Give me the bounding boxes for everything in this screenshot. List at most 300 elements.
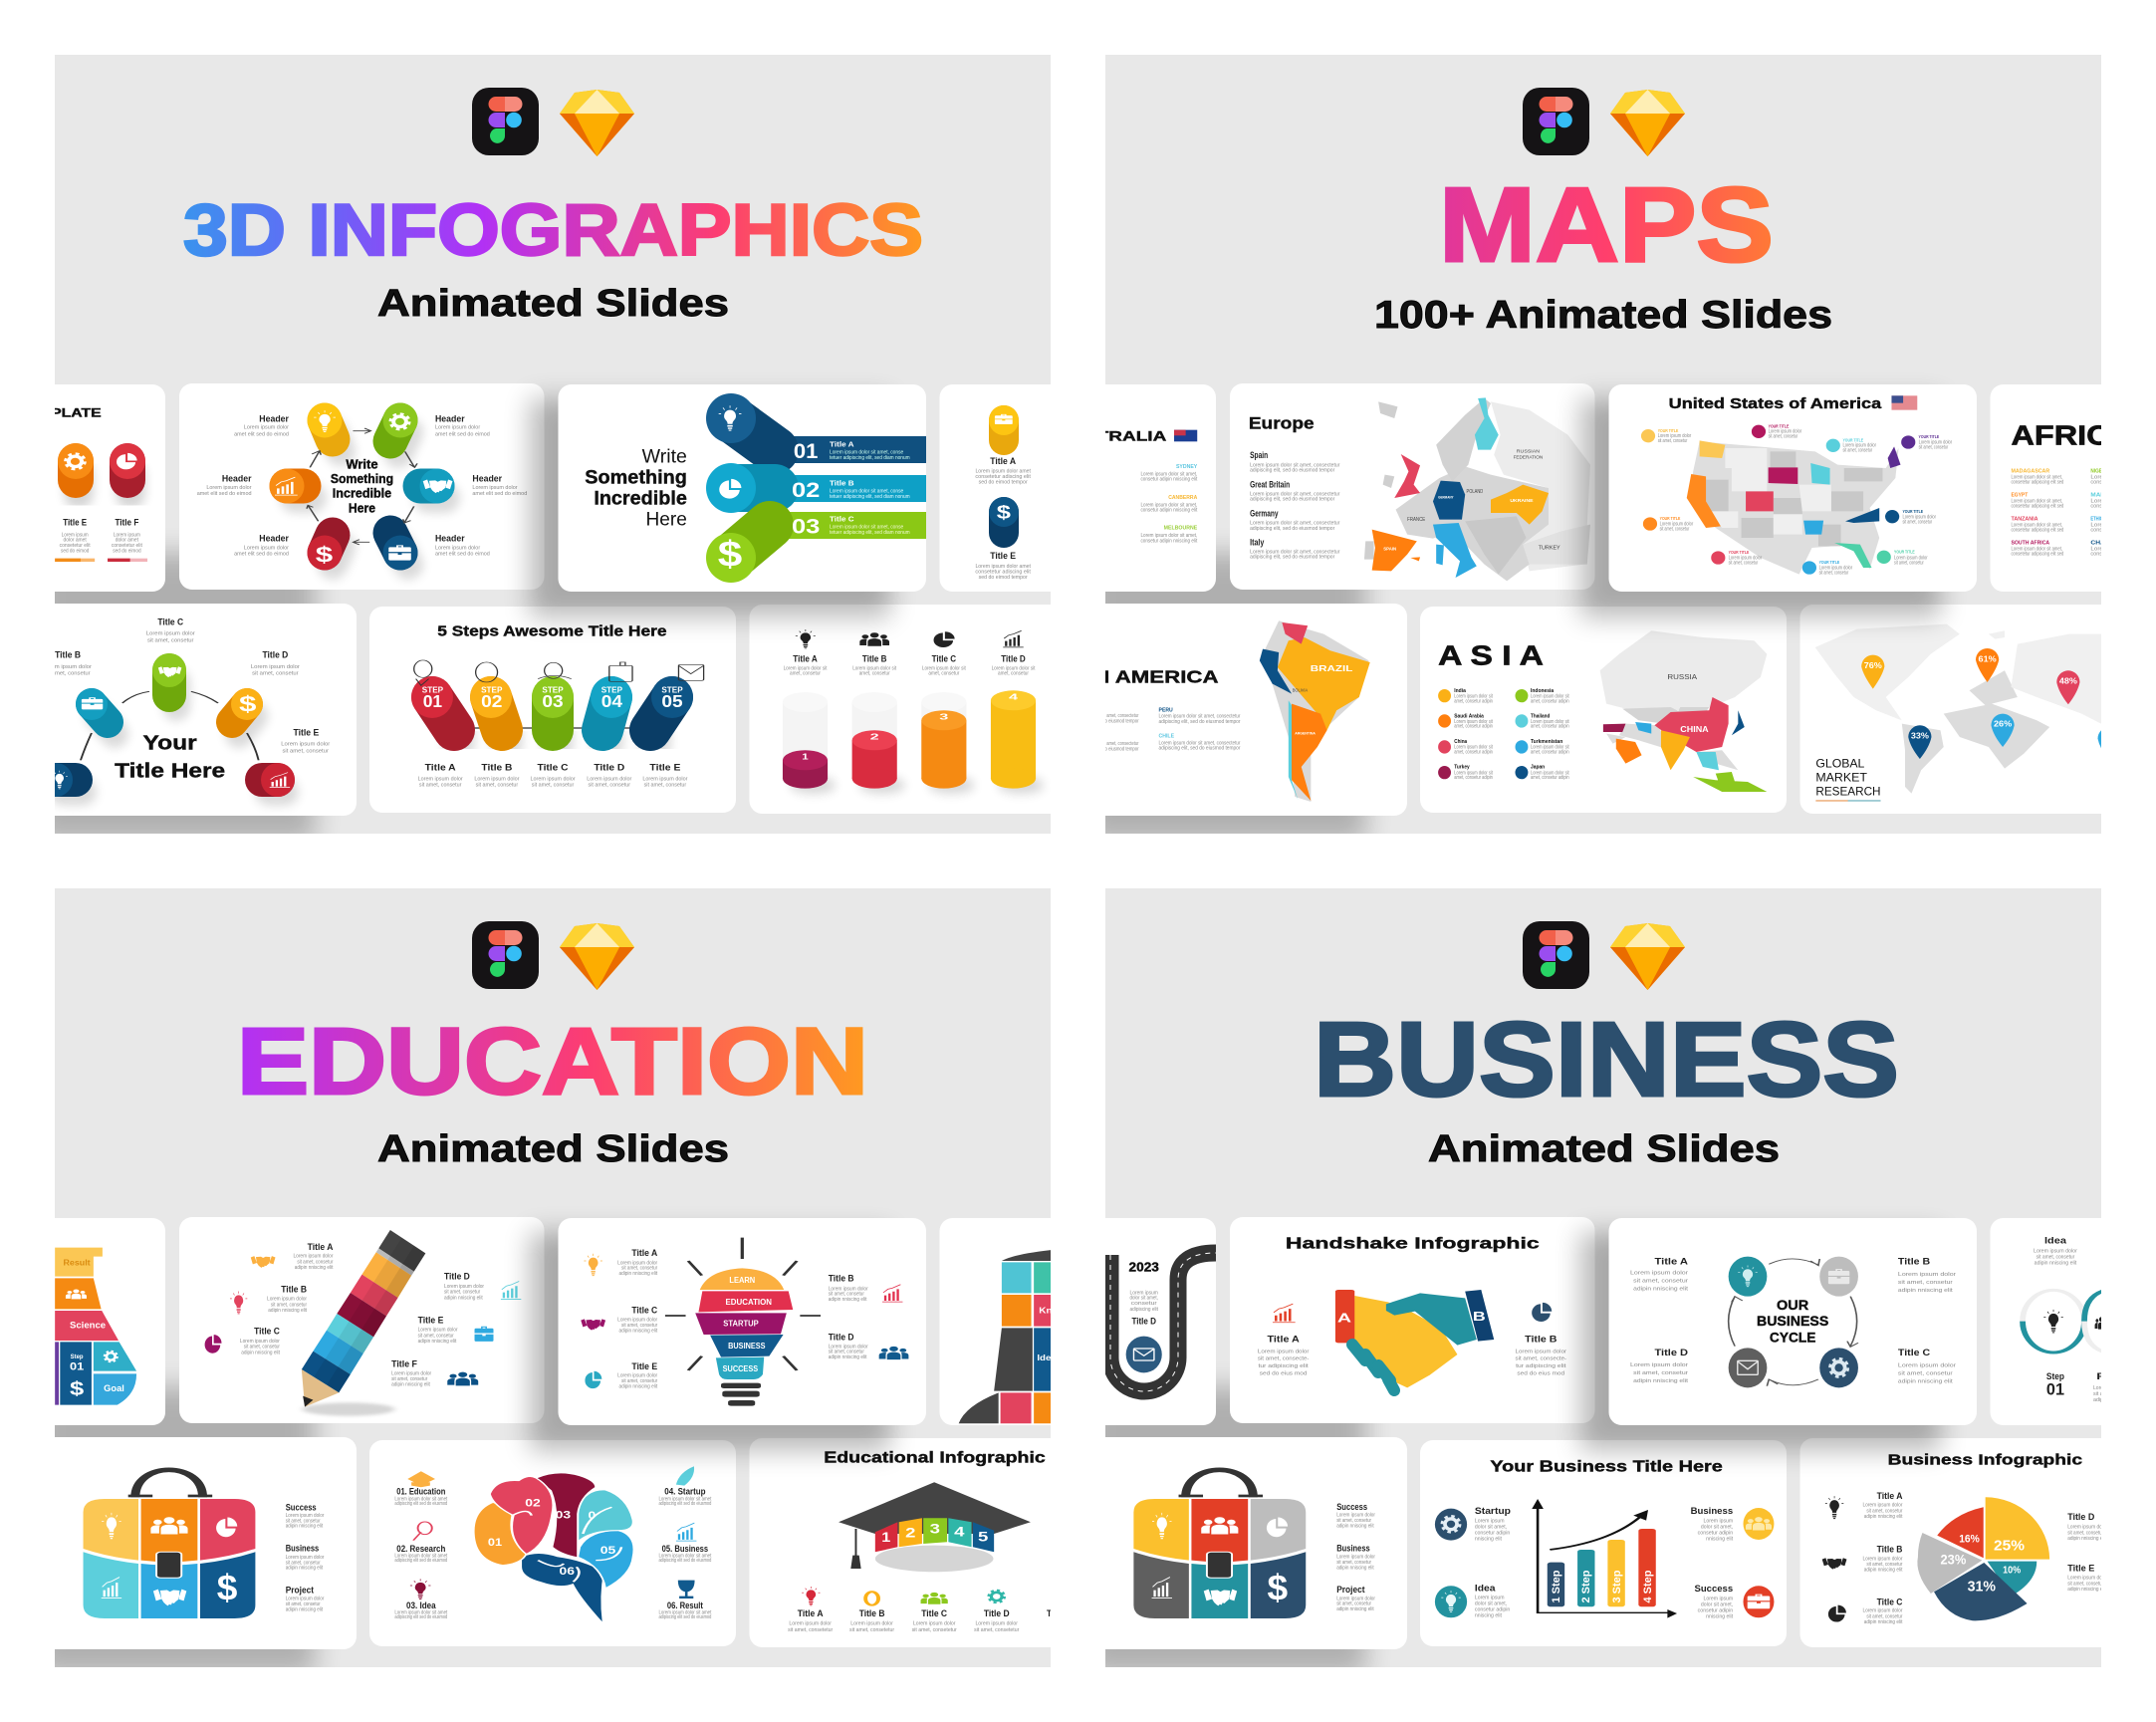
card: partial cylinders: Lorem ipsum dolor amet — [975, 468, 1031, 474]
legend: amet, consetur adipin — [1454, 723, 1493, 729]
icon: Figma logo — [1523, 88, 1589, 155]
legend: amet, consetur adipin — [1454, 698, 1493, 704]
card: pencil infographic: Title E — [418, 1315, 443, 1326]
card: brain infographic: 06. Result — [667, 1600, 703, 1610]
card: puzzle briefcase: Success — [286, 1502, 317, 1512]
card: puzzle briefcase: sit amet, consetur — [286, 1518, 321, 1524]
card: circular Your Title Here: Lorem ipsum dolor — [146, 630, 195, 636]
card: circular Your Title Here: Title Here — [115, 759, 225, 782]
card: business chart: consetur adipin — [1698, 1530, 1733, 1536]
card: business chart — [1420, 1440, 1787, 1646]
card: puzzle briefcase: Project — [286, 1585, 314, 1595]
map of Asia: CHINA — [1680, 725, 1709, 734]
card: business infographic pie: adipin nniscing elit — [2067, 1535, 2106, 1541]
card: business infographic pie: Title D — [2067, 1512, 2094, 1522]
card: handshake infographic: sit amet, consecte- — [1258, 1355, 1310, 1361]
percentage callouts: sit amet, consetur — [1842, 447, 1872, 453]
card: step rings: Idea — [2044, 1235, 2066, 1245]
card: numbered ribbons: Something — [585, 467, 687, 488]
card: Write Something Incredible Here cycle: Header — [222, 473, 252, 483]
card: puzzle briefcase: Lorem ipsum dolor — [286, 1512, 325, 1518]
title: 3D INFOGRAPHICS — [183, 190, 923, 271]
card: light bulb infographic: adipin nniscing elit — [618, 1383, 658, 1389]
title: BUSINESS — [1314, 1001, 1899, 1118]
card: business chart: Success — [1694, 1584, 1733, 1594]
card: light bulb infographic: sit amet, consetur — [621, 1322, 657, 1328]
card: template fragment: consetetur elit — [60, 542, 91, 548]
card: Write Something Incredible Here cycle: Lorem ipsum dolor — [206, 484, 252, 490]
card: Australia: consetur adipin nniscing elit — [1140, 538, 1198, 544]
card: puzzle briefcase business: adipin nniscing elit — [1336, 1605, 1374, 1611]
card: our business cycle: Lorem ipsum dolor — [1898, 1362, 1956, 1368]
card: educational infographic cap: Lorem ipsum dolor — [975, 1620, 1018, 1626]
percentage callouts: YOUR TITLE — [1729, 551, 1750, 555]
card: road timeline: dolor sit amet, — [1130, 1295, 1158, 1301]
card: cylinder bar chart: Lorem ipsum dolor sit — [922, 665, 966, 671]
card: science flask puzzle: Science — [70, 1321, 106, 1331]
panel: business — [1085, 888, 2121, 1675]
map of South America: BRAZIL — [1311, 663, 1352, 673]
card: Africa — [1990, 384, 2142, 592]
light bulb: SUCCESS — [723, 1364, 758, 1373]
card: brain infographic: 05. Business — [662, 1544, 708, 1554]
card: educational infographic cap: sit amet, consetetur — [788, 1626, 833, 1632]
card: educational infographic cap: sit amet, consetetur — [849, 1626, 894, 1632]
map of South America: ARGENTINA — [1295, 731, 1316, 736]
card: Write Something Incredible Here cycle — [179, 383, 544, 590]
card: template fragment: dolor amet — [116, 537, 138, 543]
legend: amet, consetur adipin — [1454, 774, 1493, 780]
card: brain infographic: adipiscing elit sed do eiusmod — [658, 1613, 712, 1619]
card: pencil infographic — [179, 1217, 544, 1423]
card: 5 steps: STEP — [481, 685, 502, 695]
green cylinder — [382, 402, 418, 441]
map pins — [1861, 648, 2121, 760]
card: cylinder bar chart: amet, consetur — [790, 670, 821, 676]
card: light bulb infographic: Title B — [829, 1273, 854, 1284]
percentage callouts: Lorem ipsum dolor — [1902, 514, 1936, 520]
card: numbered ribbons: Lorem ipsum dolor sit amet, conse — [830, 524, 903, 530]
card: educational infographic cap: Educational Infographic — [824, 1450, 1046, 1467]
card: numbered ribbons — [558, 384, 926, 592]
card: light bulb infographic: Lorem ipsum dolor — [829, 1286, 868, 1292]
card: road timeline: adipiscing elit — [1130, 1306, 1158, 1312]
card: brain infographic: 03. Idea — [406, 1600, 436, 1610]
legend: Thailand — [1531, 712, 1550, 719]
percentage callouts: YOUR TITLE — [1919, 435, 1939, 439]
shadow under lower-left card — [1085, 553, 1366, 842]
subtitle: Animated Slides — [377, 1128, 729, 1170]
card: South America map: CHILE — [1159, 732, 1174, 739]
icon: Figma logo — [1523, 921, 1589, 989]
graduation cap: 1 — [881, 1529, 890, 1545]
card: brain infographic: Lorem ipsum dolor sit amet — [658, 1496, 712, 1502]
card: partial cylinders: consetetur adiscing elit — [975, 473, 1031, 479]
card: 5 steps: STEP — [422, 685, 443, 695]
map of Europe: POLAND — [1466, 488, 1483, 494]
card: Australia: Lorem ipsum dolor sit amet, — [1140, 502, 1197, 508]
card: Australia: Lorem ipsum dolor sit amet, — [1140, 471, 1197, 477]
percentage callouts: YOUR TITLE — [1894, 550, 1915, 555]
card: Write Something Incredible Here cycle: Header — [259, 413, 289, 423]
percentage callouts: Lorem ipsum dolor — [1894, 555, 1928, 561]
card: 5 steps: Title C — [538, 762, 569, 772]
card: our business cycle: Lorem ipsum dolor — [1630, 1361, 1688, 1367]
card: Africa: SOUTH AFRICA — [2011, 540, 2049, 546]
light bulb: LEARN — [729, 1276, 755, 1285]
card: our business cycle — [1609, 1218, 1977, 1425]
card: cylinder bar chart — [749, 605, 1070, 814]
card: educational infographic cap: Title B — [859, 1608, 885, 1618]
card: 5 steps: Title D — [594, 762, 624, 772]
cycle diagram: OUR — [1777, 1297, 1809, 1313]
card: our business cycle: sit amet, consetur — [1633, 1369, 1688, 1375]
card: Write Something Incredible Here cycle: Incredible — [333, 487, 391, 501]
card: pencil infographic: sit amet, consetur — [297, 1259, 334, 1265]
card: pencil infographic: Lorem ipsum dolor — [391, 1370, 431, 1376]
map of Asia: RUSSIA — [1667, 673, 1697, 681]
card: United States map: sit amet, consetur — [1919, 444, 1948, 450]
graduation cap: 4 — [954, 1524, 964, 1540]
card: Write Something Incredible Here cycle: Lorem ipsum dolor — [244, 545, 289, 551]
card: Africa: MADAGASCAR — [2011, 468, 2049, 474]
card: business chart: Your Business Title Here — [1490, 1458, 1723, 1475]
card: brain infographic: 0 — [589, 1510, 596, 1522]
card: Asia map: amet, consetur adipin — [1531, 723, 1569, 729]
card: Europe map: Lorem ipsum dolor sit amet, consectetur — [1250, 549, 1340, 555]
card: business chart: nniscing elit — [1706, 1536, 1734, 1542]
card: numbered ribbons: Incredible — [594, 488, 687, 509]
navy cylinder — [382, 533, 418, 570]
card: 5 steps: sit amet, consetur — [532, 782, 574, 788]
card: Australia: CANBERRA — [1168, 494, 1198, 500]
card: science flask puzzle: Goal — [104, 1383, 124, 1394]
card: circular Your Title Here: Lorem ipsum dolor — [251, 663, 300, 669]
card: numbered ribbons: Write — [642, 446, 687, 467]
card: light bulb infographic: adipin nniscing elit — [829, 1353, 867, 1359]
icon: Sketch logo — [560, 923, 634, 990]
card: Write Something Incredible Here cycle: Lorem ipsum dolor — [244, 424, 289, 430]
card: light bulb infographic: adipin nniscing elit — [618, 1270, 658, 1276]
card: Write Something Incredible Here cycle: Lorem ipsum dolor — [435, 545, 480, 551]
card: Europe map: Lorem ipsum dolor sit amet, consectetur — [1250, 520, 1340, 526]
card: numbered ribbons: 03 — [792, 514, 820, 538]
card: Write Something Incredible Here cycle: amet elit sed do eimod — [234, 431, 289, 437]
percentage callouts: YOUR TITLE — [1658, 429, 1679, 433]
USA map — [1687, 440, 1901, 575]
card: 5 steps: 04 — [601, 691, 622, 711]
card: Europe map: Lorem ipsum dolor sit amet, consectetur — [1250, 491, 1340, 497]
card: Australia: consetur adipin nniscing elit — [1140, 476, 1198, 482]
icon: Figma logo — [472, 921, 539, 989]
handshake: B — [1473, 1310, 1486, 1324]
brain — [474, 1473, 634, 1621]
yellow cylinder — [307, 402, 343, 439]
card: Write Something Incredible Here cycle: amet elit sed do eimod — [472, 490, 528, 496]
card: numbered ribbons: Title C — [830, 516, 854, 524]
card: road timeline: 2023 — [1129, 1261, 1159, 1275]
subtitle: Animated Slides — [377, 283, 729, 325]
arrows — [307, 428, 417, 545]
card: pencil infographic: Title B — [281, 1284, 307, 1295]
card: Africa: MALI — [2090, 492, 2106, 498]
card: head puzzle: Kno — [1039, 1307, 1059, 1316]
card: educational infographic cap: Title A — [798, 1608, 824, 1618]
card: numbered ribbons: tetuer adipiscing elit, sed diam nonum — [830, 529, 910, 535]
card: Write Something Incredible Here cycle: Header — [435, 533, 465, 543]
card: puzzle briefcase business: Lorem ipsum dolor — [1336, 1554, 1375, 1560]
card: puzzle briefcase business: adipin nniscing elit — [1336, 1523, 1374, 1529]
card: circular Your Title Here: sit amet, consetur — [44, 670, 91, 676]
map of Europe — [1364, 397, 1590, 581]
card: light bulb infographic: sit amet, consetur — [621, 1377, 657, 1383]
percentage callouts: sit amet, consetur — [1769, 433, 1797, 439]
card: business chart: dolor sit amet, — [1475, 1524, 1507, 1530]
card: cylinder bar chart: Title B — [862, 653, 886, 663]
card: light bulb infographic: Title E — [631, 1361, 657, 1371]
card: puzzle briefcase business: sit amet, consetur — [1336, 1517, 1371, 1523]
card: 5 steps: Lorem ipsum dolor — [587, 776, 632, 782]
card: cylinder bar chart: Title C — [932, 653, 956, 663]
card: Write Something Incredible Here cycle: Header — [259, 533, 289, 543]
card: Write Something Incredible Here cycle: $ — [316, 543, 333, 568]
handshake — [1335, 1290, 1494, 1387]
card: template fragment: TEMPLATE — [18, 406, 102, 419]
card: light bulb infographic: sit amet, consetur — [829, 1291, 864, 1297]
card: Europe map: Italy — [1250, 537, 1264, 548]
card: puzzle briefcase: sit amet, consetur — [286, 1560, 321, 1566]
card: template fragment: dolor amet — [64, 537, 87, 543]
card: brain infographic: 02. Research — [396, 1544, 445, 1554]
card: South America map: SOUTH AMERICA — [1032, 667, 1219, 687]
card: South America map: adipiscing elit, sed do eiusmod tempor — [1159, 718, 1241, 724]
card: our business cycle: adipin nniscing elit — [1898, 1287, 1953, 1293]
legend: Turkey — [1454, 763, 1470, 770]
card: circular Your Title Here: Title C — [157, 616, 183, 626]
card: circular Your Title Here: sit amet, consetur — [147, 637, 194, 643]
step labels: 4 Step — [1642, 1570, 1654, 1603]
card: business infographic pie: Lorem ipsum dolor — [1862, 1607, 1903, 1613]
card: Australia: SYDNEY — [1176, 463, 1197, 469]
card: light bulb infographic: Title C — [631, 1305, 657, 1316]
card: 5 steps: Lorem ipsum dolor — [474, 776, 520, 782]
card: head puzzle: Idea — [1037, 1353, 1057, 1362]
cycle diagram — [1729, 1257, 1858, 1387]
card: science flask puzzle: 01 — [70, 1359, 84, 1372]
card: handshake infographic: sed do eius mod — [1517, 1370, 1565, 1376]
card: circular Your Title Here: $ — [239, 692, 257, 716]
card: educational infographic cap: sit amet, consetetur — [912, 1626, 957, 1632]
panel: education — [35, 888, 1072, 1675]
map of Europe: GERMANY — [1438, 496, 1454, 500]
card: business infographic pie: Title A — [1877, 1491, 1902, 1501]
card: numbered ribbons: 01 — [794, 439, 818, 463]
card: light bulb infographic: adipin nniscing elit — [618, 1328, 658, 1334]
card: South America map: Lorem ipsum dolor sit amet, consectetur — [1067, 712, 1139, 718]
card: pencil infographic: Lorem ipsum dolor — [418, 1327, 458, 1333]
card: business infographic pie: adipin nniscing elit — [1864, 1513, 1903, 1519]
legend: Turkmenistan — [1531, 738, 1562, 744]
percentage callouts: sit amet, consetur — [1902, 519, 1932, 525]
percentage callouts: sit amet, consetur — [1819, 570, 1848, 576]
card: Africa: Lorem ipsum dolor sit amet, — [2011, 474, 2062, 480]
card: business chart: dolor sit amet, — [1701, 1601, 1733, 1607]
card: business chart: consetur adipin — [1475, 1606, 1511, 1612]
world map — [1815, 624, 2107, 794]
card: Asia map: Lorem ipsum dolor sit — [1531, 770, 1569, 776]
card: numbered ribbons: Lorem ipsum dolor sit amet, conse — [830, 449, 903, 455]
card: puzzle briefcase business: Project — [1336, 1585, 1365, 1595]
shadow of the USA card — [1580, 398, 1941, 617]
percentage callouts: YOUR TITLE — [1819, 561, 1840, 565]
pie chart: 10% — [2003, 1565, 2021, 1576]
card: South America map: Lorem ipsum dolor sit amet, consectetur — [1067, 740, 1139, 746]
card: cylinder bar chart: Lorem ipsum dolor sit — [992, 665, 1036, 671]
card: global market research: GLOBAL — [1815, 757, 1864, 770]
card: light bulb infographic — [558, 1218, 926, 1425]
card: template fragment: consetetur elit — [112, 542, 142, 548]
heading: 5 Steps Awesome Title Here — [437, 622, 667, 639]
card: pencil infographic: sit amet, consetur — [391, 1375, 427, 1381]
card: light bulb infographic: Lorem ipsum dolor — [617, 1260, 657, 1266]
card: step rings: Step — [2046, 1371, 2064, 1381]
card: brain infographic: Lorem ipsum dolor sit amet — [658, 1609, 712, 1615]
card: our business cycle: Title C — [1898, 1348, 1930, 1357]
card: pencil infographic: Title F — [391, 1358, 417, 1368]
card: handshake infographic: Title A — [1268, 1334, 1300, 1344]
card: cylinder bar chart: Title A — [793, 653, 818, 663]
card: 5 steps: sit amet, consetur — [644, 782, 686, 788]
card: 5 steps: sit amet, consetur — [419, 782, 462, 788]
card: handshake infographic: sit amet, consecte- — [1516, 1355, 1566, 1361]
card: light bulb infographic: Lorem ipsum dolor — [829, 1344, 868, 1350]
map of South America — [1260, 620, 1370, 802]
card: step rings: sit amet, consetur — [2036, 1254, 2074, 1260]
card: business infographic pie: Title B — [1877, 1544, 1902, 1554]
card: business chart: nniscing elit — [1475, 1536, 1502, 1542]
legend: Lorem ipsum dolor sit — [1454, 693, 1493, 699]
legend: India — [1454, 687, 1466, 693]
step labels: 3 Step — [1611, 1570, 1623, 1603]
card: template fragment: sed do eimod — [61, 548, 90, 554]
card: South America map: adipiscing elit, sed do eiusmod tempor — [1067, 746, 1139, 752]
teal cylinder — [420, 468, 454, 504]
legend — [1438, 687, 1569, 780]
briefcase — [84, 1470, 255, 1618]
card: business chart: dolor sit amet, — [1701, 1524, 1733, 1530]
card: brain infographic: adipiscing elit sed do eiusmod — [658, 1557, 712, 1563]
flag — [1891, 395, 1917, 410]
card: South America map: adipiscing elit, sed do eiusmod tempor — [1159, 745, 1241, 751]
card: brain infographic: adipiscing elit sed do eiusmod — [658, 1500, 712, 1506]
percentage callouts: Lorem ipsum dolor — [1819, 565, 1852, 571]
card: step rings: adipin nniscing elit — [2035, 1260, 2077, 1266]
card: Write Something Incredible Here cycle: amet elit sed do eimod — [435, 551, 490, 557]
title: EDUCATION — [237, 1009, 868, 1114]
card: business infographic pie: Lorem ipsum dolor — [2067, 1575, 2107, 1581]
card: cylinder bar chart: 1 — [802, 752, 809, 762]
pie chart: 16% — [1959, 1533, 1980, 1545]
card: Africa: CHAD — [2090, 540, 2110, 546]
card: brain infographic: 06 — [559, 1566, 575, 1578]
card: business chart: nniscing elit — [1475, 1612, 1502, 1618]
step labels: 2 Step — [1580, 1570, 1592, 1603]
card: puzzle briefcase: adipin nniscing elit — [286, 1565, 324, 1571]
card: brain infographic: 05 — [600, 1545, 615, 1557]
card: step rings: Lorem ipsum dolor — [2034, 1248, 2077, 1254]
card: business chart: Lorem ipsum — [1703, 1518, 1733, 1524]
card: Africa: EGYPT — [2011, 492, 2028, 498]
card: Europe map: Lorem ipsum dolor sit amet, consectetur — [1250, 462, 1340, 468]
card: our business cycle: adipin nniscing elit — [1633, 1377, 1689, 1383]
percentage callouts: YOUR TITLE — [1660, 517, 1681, 521]
card: 5 steps: 01 — [423, 691, 442, 711]
card: business infographic pie: adipin nniscing elit — [2067, 1586, 2106, 1592]
bar chart — [1532, 1499, 1677, 1618]
card: road timeline — [1085, 1218, 1216, 1425]
card: Australia: MELBOURNE — [1164, 524, 1197, 531]
subtitle: 100+ Animated Slides — [1374, 294, 1832, 337]
card: United States map: Lorem ipsum dolor — [1919, 439, 1952, 445]
card: circular Your Title Here — [35, 604, 357, 816]
card: pencil infographic: adipin nniscing elit — [391, 1381, 430, 1387]
card: Write Something Incredible Here cycle: Lorem ipsum dolor — [472, 484, 518, 490]
card: business chart: Lorem ipsum — [1475, 1518, 1505, 1524]
card: business infographic pie: sit amet, consetur — [1866, 1561, 1903, 1567]
card: 5 steps: 03 — [542, 691, 564, 711]
card: science flask puzzle: $ — [70, 1377, 85, 1399]
card: pencil infographic: Lorem ipsum dolor — [267, 1296, 307, 1302]
percentage callouts — [1641, 424, 1952, 576]
card: Australia: AUSTRALIA — [1058, 427, 1166, 444]
card: United States map: United States of America — [1669, 395, 1882, 411]
step icons — [414, 660, 704, 685]
map pins: 26% — [1994, 719, 2012, 729]
card: Africa: TANZANIA — [2011, 516, 2038, 522]
step labels: 1 Step — [1551, 1570, 1562, 1603]
orange cylinder — [269, 468, 305, 504]
handshake fingers — [1352, 1345, 1394, 1390]
card: our business cycle: Lorem ipsum dolor — [1630, 1270, 1688, 1276]
card: brain infographic: 01. Education — [396, 1486, 445, 1497]
map of Europe: RUSSIAN — [1517, 449, 1540, 454]
map of Europe: UKRAINE — [1510, 498, 1534, 503]
card: 5 steps: Lorem ipsum dolor — [642, 776, 688, 782]
card: our business cycle: Title D — [1654, 1348, 1688, 1357]
card: business infographic pie: sit amet, consetur — [2067, 1530, 2103, 1536]
card: business infographic pie: adipin nniscing elit — [1864, 1618, 1903, 1624]
card: 5 steps: Lorem ipsum dolor — [418, 776, 463, 782]
card: numbered ribbons: $ — [718, 534, 742, 574]
card: light bulb infographic: Lorem ipsum dolor — [617, 1317, 657, 1323]
card: light bulb infographic: Title D — [829, 1332, 854, 1342]
card: template fragment — [55, 384, 165, 592]
card: business infographic pie — [1800, 1438, 2121, 1647]
card: light bulb infographic: adipin nniscing elit — [829, 1296, 867, 1302]
card: puzzle briefcase business: sit amet, consetur — [1336, 1559, 1371, 1565]
card: business chart: Lorem ipsum — [1703, 1596, 1733, 1601]
card: puzzle briefcase business — [1085, 1437, 1407, 1649]
card: step rings: 01 — [2046, 1380, 2064, 1398]
percentage callouts: Lorem ipsum dolor — [1658, 432, 1691, 438]
card: brain infographic: Lorem ipsum dolor sit amet — [394, 1609, 448, 1615]
card: cylinder bar chart: amet, consetur — [998, 670, 1029, 676]
map pins: 48% — [2059, 676, 2077, 686]
light bulb — [665, 1238, 821, 1406]
card: pencil infographic: adipin nniscing elit — [241, 1350, 280, 1355]
card: step rings — [1990, 1218, 2121, 1425]
card: business chart: dolor sit amet, — [1475, 1600, 1507, 1606]
